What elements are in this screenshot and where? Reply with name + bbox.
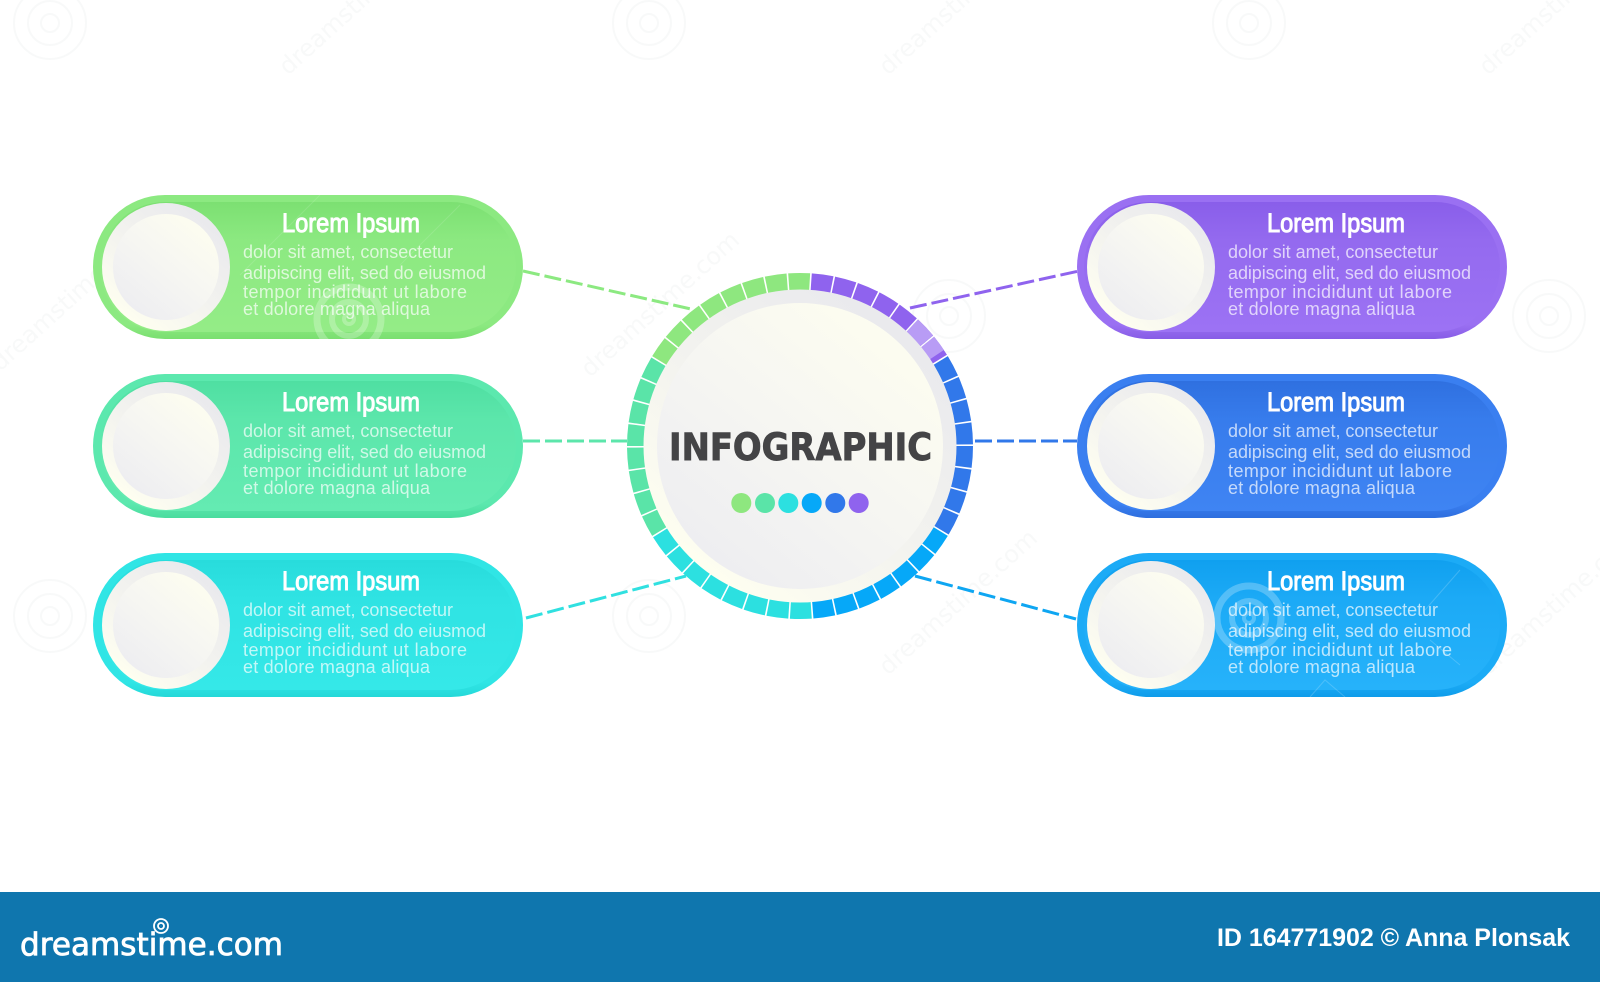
panel: blue pill — [1077, 374, 1507, 518]
body text: tempor incididunt ut labore — [243, 282, 467, 302]
body text: dolor sit amet, consectetur — [1228, 242, 1438, 262]
connector: sky — [915, 576, 1076, 619]
body text: tempor incididunt ut labore — [243, 461, 467, 481]
body text: adipiscing elit, sed do eiusmod — [1228, 442, 1471, 462]
background watermark marks: dreamstime.com — [873, 524, 1043, 680]
heading: Lorem Ipsum — [1267, 566, 1405, 596]
background watermark marks — [0, 0, 1600, 680]
body text: tempor incididunt ut labore — [1228, 461, 1452, 481]
panel: mint pill — [93, 374, 523, 518]
body text: dolor sit amet, consectetur — [1228, 421, 1438, 441]
panel: green pill — [93, 195, 523, 339]
central hub — [568, 214, 1032, 678]
body text: adipiscing elit, sed do eiusmod — [243, 442, 486, 462]
heading: Lorem Ipsum — [1267, 208, 1405, 238]
body text — [1228, 242, 1471, 319]
body text: tempor incididunt ut labore — [243, 640, 467, 660]
panel: purple pill — [1077, 195, 1507, 339]
footer logo: dreamstime.com — [20, 927, 283, 963]
body text: dolor sit amet, consectetur — [243, 242, 453, 262]
heading: Lorem Ipsum — [282, 387, 420, 417]
icon placeholder circle — [1087, 561, 1215, 689]
watermark spirals over pills — [240, 195, 1460, 697]
body text: adipiscing elit, sed do eiusmod — [1228, 263, 1471, 283]
icon placeholder circle — [102, 203, 230, 331]
body text — [1228, 600, 1471, 677]
body text: dolor sit amet, consectetur — [1228, 600, 1438, 620]
body text — [243, 242, 486, 319]
body text: et dolore magna aliqua — [1228, 657, 1416, 677]
colour dots — [731, 493, 869, 513]
body text: dolor sit amet, consectetur — [243, 421, 453, 441]
body text: dolor sit amet, consectetur — [243, 600, 453, 620]
body text — [243, 421, 486, 498]
connector: blue — [975, 440, 1077, 442]
panel: teal pill — [93, 553, 523, 697]
connector: teal — [526, 576, 686, 618]
connector: mint — [523, 440, 627, 442]
body text: et dolore magna aliqua — [243, 478, 431, 498]
icon placeholder circle — [102, 382, 230, 510]
panel: sky pill — [1077, 553, 1507, 697]
connector: green — [523, 271, 691, 309]
inner disc — [657, 303, 943, 589]
heading: Lorem Ipsum — [282, 566, 420, 596]
body text — [1228, 421, 1471, 498]
body text: et dolore magna aliqua — [243, 299, 431, 319]
body text: adipiscing elit, sed do eiusmod — [243, 621, 486, 641]
background watermark marks: dreamstime.com — [575, 226, 745, 382]
outer disc — [644, 290, 956, 602]
connector: purple — [910, 271, 1079, 308]
icon placeholder circle — [1087, 382, 1215, 510]
icon placeholder circle — [1087, 203, 1215, 331]
icon placeholder circle — [102, 561, 230, 689]
heading: Lorem Ipsum — [1267, 387, 1405, 417]
body text: et dolore magna aliqua — [1228, 478, 1416, 498]
body text: et dolore magna aliqua — [1228, 299, 1416, 319]
body text — [243, 600, 486, 677]
body text: tempor incididunt ut labore — [1228, 640, 1452, 660]
footer credit: ID 164771902 © Anna Plonsak — [1217, 924, 1570, 952]
body text: et dolore magna aliqua — [243, 657, 431, 677]
segmented ring — [568, 214, 1032, 678]
body text: adipiscing elit, sed do eiusmod — [243, 263, 486, 283]
icon: logo spiral — [154, 919, 168, 933]
heading: Lorem Ipsum — [282, 208, 420, 238]
body text: tempor incididunt ut labore — [1228, 282, 1452, 302]
body text: adipiscing elit, sed do eiusmod — [1228, 621, 1471, 641]
footer bar — [0, 892, 1600, 982]
title: INFOGRAPHIC — [669, 426, 932, 469]
